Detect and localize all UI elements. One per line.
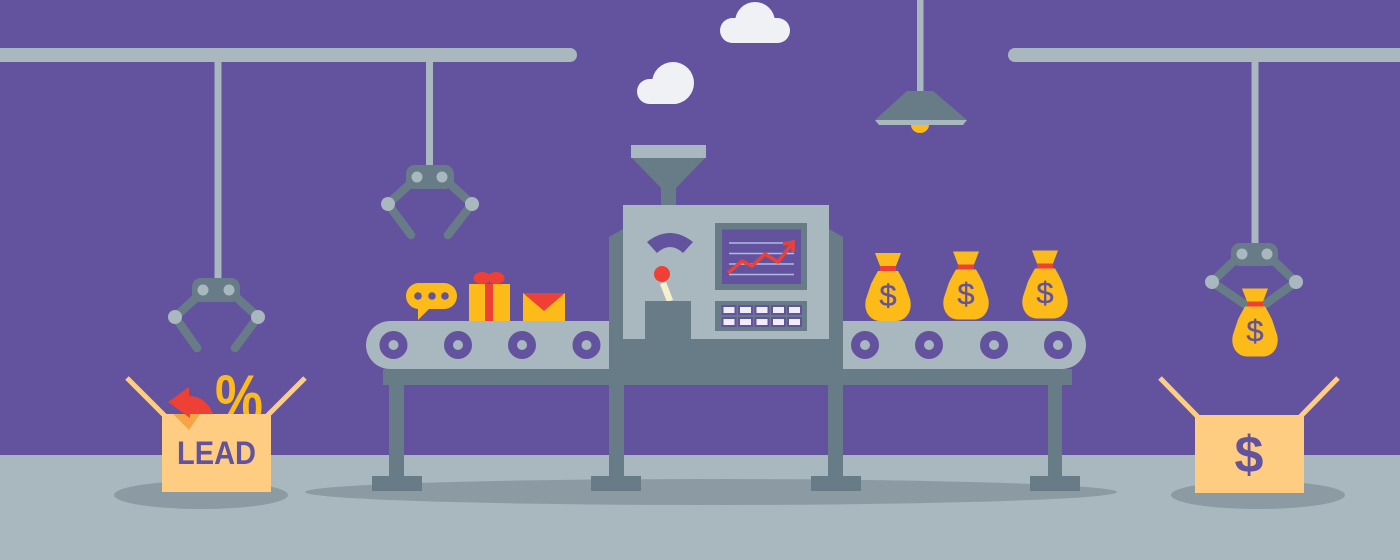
money bag 2: $ <box>957 276 975 312</box>
floor shadow: lead box <box>114 481 288 509</box>
box front <box>1195 415 1304 493</box>
left conveyor belt <box>366 321 612 369</box>
money bag 2 <box>943 252 989 320</box>
money bag 4: held by claw <box>1232 288 1278 356</box>
ceiling lamp <box>875 0 967 133</box>
cloud: upper <box>720 2 790 43</box>
money bag 3 <box>1022 250 1068 318</box>
icon: envelope <box>523 293 565 321</box>
robot claw: middle <box>381 60 479 235</box>
money bag 3: $ <box>1036 276 1054 310</box>
machine front panel <box>623 205 829 339</box>
box flaps <box>127 378 305 416</box>
money bag 1 <box>865 253 911 321</box>
chart screen <box>715 223 807 290</box>
floor shadow: revenue box <box>1171 481 1345 509</box>
machine base <box>609 229 843 385</box>
robot claw: holding money bag <box>1205 60 1303 305</box>
robot claw: over lead box <box>168 60 265 348</box>
lever housing <box>645 301 691 339</box>
right ceiling rail <box>1008 48 1400 62</box>
cloud: lower <box>637 62 694 104</box>
hopper <box>631 145 706 206</box>
machine <box>609 145 843 385</box>
box flaps <box>1160 378 1338 417</box>
conveyor table frame <box>372 369 1080 491</box>
red return arrow <box>168 387 213 418</box>
factory floor <box>0 455 1400 560</box>
lever <box>654 266 670 301</box>
lead box <box>127 361 305 492</box>
keypad <box>715 301 807 331</box>
revenue box <box>1160 378 1338 493</box>
gauge <box>647 233 693 253</box>
LEAD label: LEAD <box>177 435 256 471</box>
left ceiling rail <box>0 48 577 62</box>
money bag 1: $ <box>879 278 897 313</box>
box front <box>162 414 271 492</box>
floor shadow: machine <box>305 479 1117 505</box>
right conveyor belt <box>840 321 1086 369</box>
orange fold <box>173 414 200 430</box>
money bag 4: held by claw: $ <box>1246 314 1264 348</box>
icon: chat bubble <box>406 283 457 320</box>
dollar sign: $ <box>1235 426 1264 484</box>
icon: gift box <box>469 272 510 321</box>
percent sign: % <box>215 361 263 435</box>
